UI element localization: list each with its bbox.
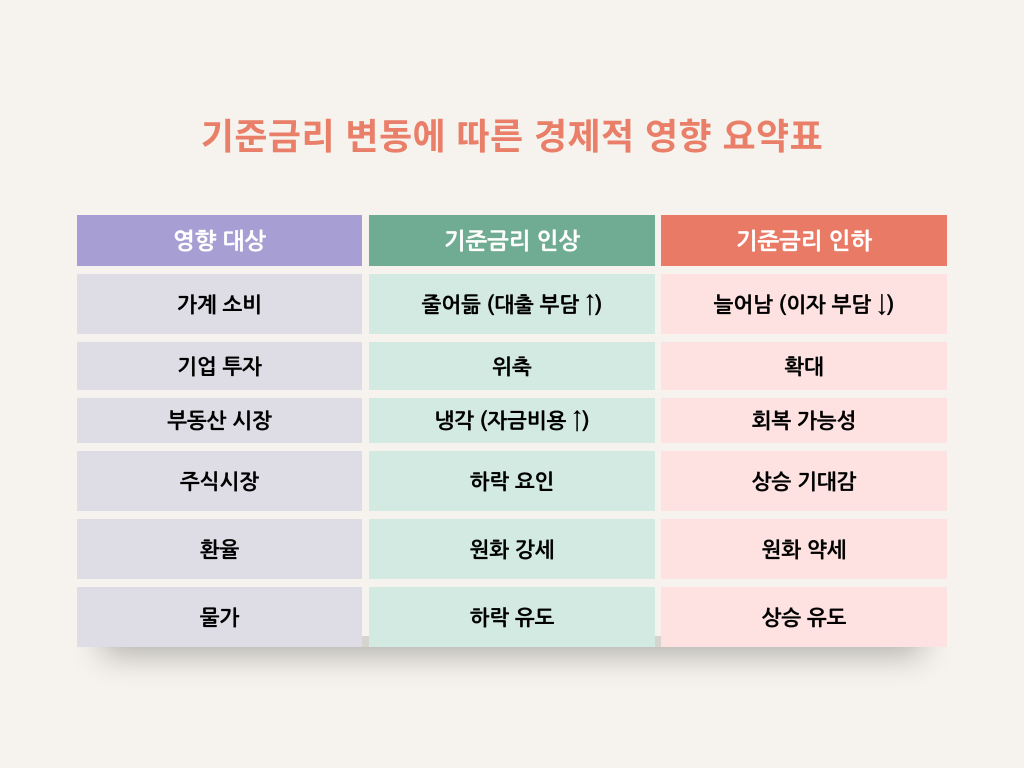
header: rate cut: 기준금리 인하 (736, 230, 872, 252)
row: exchange rate hike: 원화 강세 (470, 540, 554, 560)
row: corporate investment cut (661, 342, 947, 390)
row: prices label: 물가 (200, 608, 239, 628)
row: corporate investment label (77, 342, 362, 390)
row: household consumption hike (369, 274, 655, 334)
row: household consumption cut: 늘어남 (이자 부담 ↓) (714, 294, 894, 316)
row: exchange rate cut: 원화 약세 (762, 540, 846, 560)
row: exchange rate label: 환율 (200, 540, 239, 560)
row: corporate investment hike (369, 342, 655, 390)
row: prices cut: 상승 유도 (762, 608, 846, 628)
row: household consumption cut (661, 274, 947, 334)
row: exchange rate label (77, 519, 362, 579)
row: household consumption label (77, 274, 362, 334)
header: target (77, 215, 362, 266)
shadow in right column gap (655, 636, 661, 647)
row: real estate label (77, 398, 362, 443)
row: stock market label (77, 451, 362, 511)
row: prices hike: 하락 유도 (470, 608, 554, 628)
row: real estate cut (661, 398, 947, 443)
row: prices cut (661, 587, 947, 647)
row: corporate investment cut: 확대 (784, 356, 824, 378)
header: rate hike: 기준금리 인상 (444, 230, 580, 252)
header: target: 영향 대상 (173, 230, 266, 252)
title: 기준금리 변동에 따른 경제적 영향 요약표 (201, 116, 823, 157)
row: prices hike (369, 587, 655, 647)
row: exchange rate hike (369, 519, 655, 579)
row: real estate hike (369, 398, 655, 443)
row: exchange rate cut (661, 519, 947, 579)
row: stock market hike: 하락 요인 (470, 472, 554, 492)
row: real estate label: 부동산 시장 (167, 411, 272, 432)
header: rate cut (661, 215, 947, 266)
shadow in left column gap (362, 636, 369, 647)
row: stock market cut: 상승 기대감 (752, 472, 856, 492)
row: real estate cut: 회복 가능성 (752, 411, 856, 432)
row: prices label (77, 587, 362, 647)
row: stock market label: 주식시장 (180, 472, 259, 492)
header: rate hike (369, 215, 655, 266)
row: household consumption label: 가계 소비 (177, 294, 262, 316)
row: stock market hike (369, 451, 655, 511)
row: household consumption hike: 줄어듦 (대출 부담 ↑) (422, 294, 602, 316)
row: stock market cut (661, 451, 947, 511)
table shadow (88, 647, 936, 673)
row: corporate investment label: 기업 투자 (177, 356, 262, 378)
row: corporate investment hike: 위축 (492, 356, 532, 378)
row: real estate hike: 냉각 (자금비용 ↑) (434, 411, 590, 432)
